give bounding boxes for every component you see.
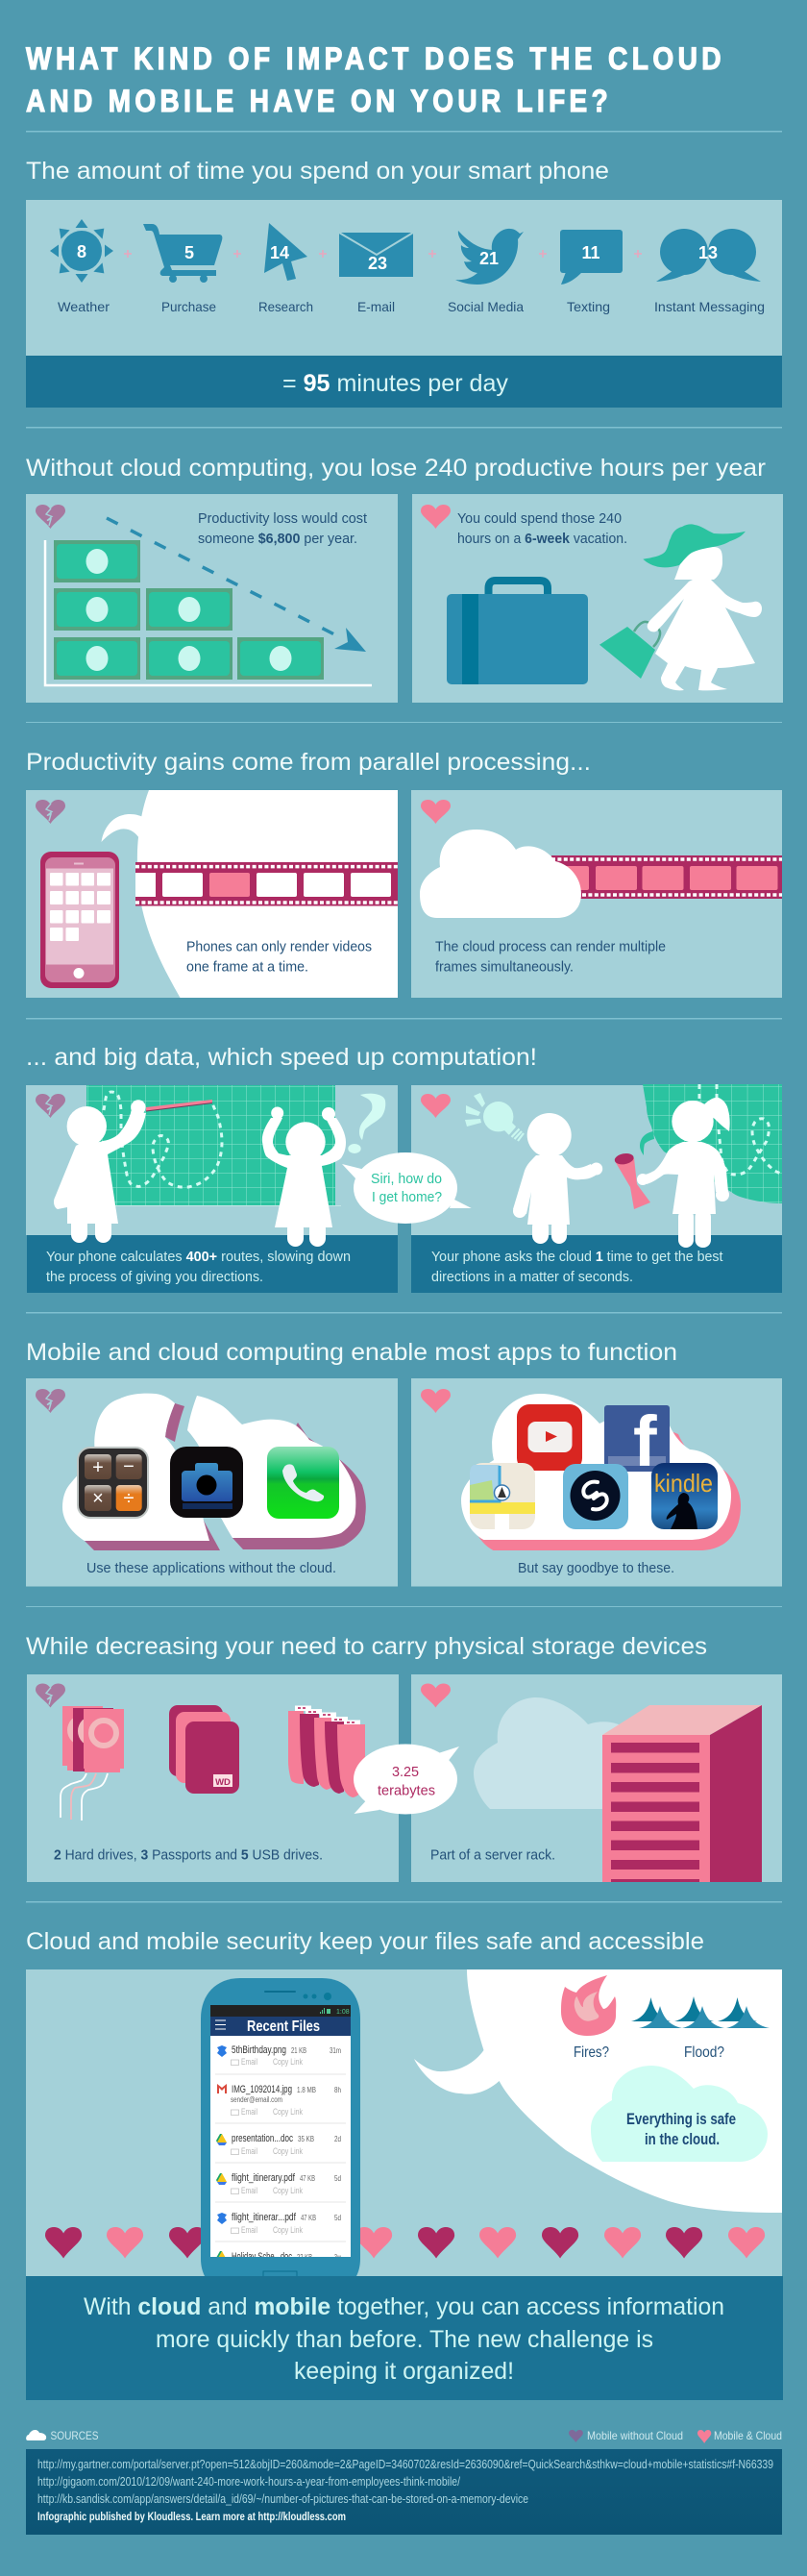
caption: Use these applications without the cloud. bbox=[86, 1561, 336, 1576]
icon: weather sun bbox=[50, 219, 113, 283]
text: cloud bbox=[435, 940, 666, 975]
file row: 5thBirthday.png: 31m bbox=[330, 2046, 341, 2055]
app title bar: Recent Files bbox=[247, 2019, 320, 2035]
icon: calculator app: × bbox=[92, 1488, 104, 1509]
conclusion bar bbox=[26, 2276, 783, 2400]
text: phones bbox=[186, 940, 372, 975]
text: vacation bbox=[457, 511, 627, 547]
file row: flight_itinerar...pdf: Email bbox=[241, 2225, 257, 2235]
icon: envelope: 23 bbox=[368, 254, 387, 273]
illustration: film strip, all frames bbox=[548, 855, 782, 899]
file row: 5thBirthday.png bbox=[217, 2044, 341, 2067]
file row: IMG_1092014.jpg: Copy Link bbox=[273, 2107, 303, 2117]
total bar: 95 minutes per day: = 95 minutes per day bbox=[282, 370, 508, 397]
icon: shopping cart: 5 bbox=[184, 243, 194, 262]
activity labels: Social Media bbox=[448, 299, 524, 314]
speech bubble: Siri bbox=[342, 1152, 472, 1224]
icon: twitter bird: 21 bbox=[479, 249, 499, 268]
callout: safe cloud bbox=[591, 2066, 768, 2162]
file row: presentation...doc: Email bbox=[241, 2146, 257, 2156]
icon: shopping cart bbox=[143, 224, 222, 283]
legend: Mobile & Cloud bbox=[714, 2429, 782, 2442]
file row: presentation...doc: 2d bbox=[334, 2135, 341, 2143]
icon: passports bbox=[169, 1705, 239, 1794]
panel: sources: http://kb.sandisk.com/app/answers/detail/a_id/69/~/number-of-pictures-that-can-be-stored-on-a-memory-device bbox=[37, 2492, 528, 2506]
panel: apps without cloud bbox=[26, 1378, 398, 1586]
icon: camera app bbox=[170, 1447, 243, 1518]
plus signs bbox=[124, 250, 642, 258]
illustration: smart phone with recent files bbox=[201, 1978, 360, 2277]
file row: flight_itinerary.pdf: flight_itinerary.pdf bbox=[232, 2172, 296, 2184]
icon: broken heart bbox=[36, 1389, 65, 1413]
text: 400+ routes: the process of giving you directions. bbox=[46, 1270, 263, 1285]
title bbox=[26, 41, 725, 118]
text: drives: 2 Hard drives, 3 Passports and 5 USB drives. bbox=[54, 1847, 323, 1863]
icon: server rack bbox=[602, 1705, 762, 1882]
icon: weather sun: 8 bbox=[77, 242, 86, 261]
file row: flight_itinerary.pdf: 47 KB bbox=[300, 2174, 315, 2183]
heading: big data: ... and big data, which speed up computation! bbox=[26, 1044, 537, 1071]
callout: safe cloud: in the cloud. bbox=[645, 2131, 720, 2148]
total bar: 95 minutes per day bbox=[26, 356, 782, 408]
icon: cursor: 14 bbox=[270, 243, 289, 262]
conclusion bar: With cloud and mobile together, you can access information bbox=[84, 2293, 724, 2320]
illustration: whole cloud bbox=[461, 1394, 741, 1550]
speech bubble: terabytes: 3.25 bbox=[392, 1764, 419, 1780]
icon: cloud bbox=[420, 830, 581, 918]
text: cost: Productivity loss would cost bbox=[198, 511, 367, 527]
illustration: person with raised arms bbox=[262, 1107, 346, 1247]
text: vacation: You could spend those 240 bbox=[457, 511, 622, 527]
speech bubble: Siri: Siri, how do bbox=[371, 1171, 442, 1187]
icon: fire bbox=[561, 1975, 616, 2036]
text: phones: one frame at a time. bbox=[186, 959, 308, 975]
file row: presentation...doc: presentation...doc bbox=[232, 2133, 293, 2144]
file list bbox=[210, 2036, 351, 2263]
activity labels: Texting bbox=[567, 299, 610, 314]
file row: IMG_1092014.jpg: Email bbox=[241, 2107, 257, 2117]
text: 1 time: Your phone asks the cloud 1 time to get the best bbox=[431, 1250, 722, 1265]
file row: flight_itinerary.pdf bbox=[216, 2172, 341, 2195]
text: cloud: The cloud process can render multiple bbox=[435, 940, 666, 955]
icon: calculator app: − bbox=[123, 1456, 134, 1477]
panel: vacation bbox=[412, 494, 783, 703]
file row: flight_itinerar...pdf bbox=[217, 2212, 341, 2235]
file row: 5thBirthday.png: Email bbox=[241, 2057, 257, 2067]
icon: heart bbox=[421, 505, 451, 529]
text: server: Part of a server rack. bbox=[430, 1847, 555, 1863]
icon: flood waves bbox=[631, 1996, 770, 2028]
illustration: girl with ponytail bbox=[637, 1098, 730, 1248]
caption: But say goodbye to these. bbox=[518, 1561, 674, 1576]
panel: phone renders one frame bbox=[26, 790, 398, 998]
activity labels: Weather bbox=[58, 299, 110, 314]
file row: flight_itinerar...pdf: 47 KB bbox=[301, 2214, 316, 2222]
file row: flight_itinerary.pdf: 5d bbox=[334, 2174, 341, 2183]
icon: question mark bbox=[348, 1094, 385, 1153]
icon: chat bubbles: 13 bbox=[698, 243, 718, 262]
file row: flight_itinerary.pdf: Copy Link bbox=[273, 2186, 303, 2195]
icon: light bulb bbox=[465, 1093, 524, 1141]
app title bar bbox=[210, 2017, 351, 2036]
icon: heart bbox=[421, 1094, 451, 1118]
panel: server rack bbox=[411, 1674, 782, 1882]
file row: presentation...doc bbox=[216, 2133, 341, 2156]
heading: security: Cloud and mobile security keep your files safe and accessible bbox=[26, 1928, 704, 1955]
heading: parallel processing: Productivity gains come from parallel processing... bbox=[26, 749, 591, 776]
file row: 5thBirthday.png: 21 KB bbox=[291, 2046, 306, 2055]
activity labels bbox=[58, 299, 765, 314]
legend bbox=[569, 2429, 782, 2443]
panel: security bbox=[26, 1969, 782, 2277]
icon: pale cloud bbox=[474, 1697, 634, 1809]
text: cost: someone $6,800 per year. bbox=[198, 532, 357, 547]
icon: kindle app: kindle bbox=[654, 1469, 713, 1498]
icon: scroll bbox=[614, 1152, 650, 1209]
file row: flight_itinerar...pdf: Copy Link bbox=[273, 2225, 303, 2235]
white speech bubble bbox=[414, 1969, 782, 2213]
icon: broken heart bbox=[36, 1094, 65, 1118]
activity labels: Instant Messaging bbox=[654, 299, 765, 314]
icon: kindle app bbox=[651, 1463, 718, 1529]
text: fires, flood: Flood? bbox=[684, 2044, 724, 2061]
file row: Holiday Sche...doc, cut off bbox=[217, 2251, 341, 2257]
file row: flight_itinerar...pdf: flight_itinerar...pdf bbox=[232, 2212, 297, 2223]
file row: Holiday Sche...doc, cut off: 22 KB bbox=[297, 2253, 312, 2262]
heading: storage: While decreasing your need to carry physical storage devices bbox=[26, 1633, 707, 1660]
speech bubble: Siri: I get home? bbox=[372, 1189, 442, 1205]
sources heading: SOURCES bbox=[50, 2429, 98, 2442]
panel: physical storage bbox=[27, 1674, 399, 1882]
sources heading bbox=[26, 2429, 98, 2442]
file row: Holiday Sche...doc, cut off: 3w bbox=[334, 2253, 341, 2262]
activity labels: Purchase bbox=[161, 299, 216, 314]
callout: safe cloud: Everything is safe bbox=[626, 2111, 736, 2128]
icon: heart bbox=[421, 1684, 451, 1707]
arrow: downward trend bbox=[107, 518, 366, 652]
chalkboard bbox=[640, 1084, 783, 1203]
icon: heart bbox=[421, 1389, 451, 1413]
text: phones: Phones can only render videos bbox=[186, 940, 372, 955]
panel: phone calculates routes bbox=[26, 1085, 398, 1293]
title: WHAT KIND OF IMPACT DOES THE CLOUD bbox=[26, 41, 725, 76]
file row: 5thBirthday.png: Copy Link bbox=[273, 2057, 303, 2067]
heading: lost hours: Without cloud computing, you lose 240 productive hours per year bbox=[26, 455, 766, 482]
activity labels: E-mail bbox=[357, 299, 395, 314]
title: AND MOBILE HAVE ON YOUR LIFE? bbox=[26, 84, 612, 118]
illustration: broken cloud bbox=[62, 1394, 366, 1550]
activity labels: Research bbox=[258, 299, 313, 314]
speech bubble: terabytes bbox=[354, 1744, 459, 1815]
file row: IMG_1092014.jpg: IMG_1092014.jpg bbox=[232, 2084, 292, 2095]
text: 1 time bbox=[431, 1250, 722, 1285]
icon: calculator app: + bbox=[92, 1457, 104, 1478]
icon: twitter bird bbox=[455, 229, 524, 285]
file row: IMG_1092014.jpg: 8h bbox=[334, 2086, 341, 2094]
file row: 5thBirthday.png: 5thBirthday.png bbox=[232, 2044, 286, 2056]
panel: sources bbox=[26, 2449, 782, 2535]
icon: facebook app bbox=[604, 1401, 670, 1481]
chalkboard bbox=[86, 1085, 341, 1206]
text: vacation: hours on a 6-week vacation. bbox=[457, 532, 627, 547]
panel: sources: http://gigaom.com/2010/12/09/want-240-more-work-hours-a-year-from-employees-think-mobile/ bbox=[37, 2475, 460, 2489]
illustration: girl with hat and bag bbox=[599, 524, 762, 690]
icon: chat bubbles bbox=[656, 229, 761, 282]
icon: calculator app: ÷ bbox=[124, 1488, 134, 1509]
heading: apps: Mobile and cloud computing enable most apps to function bbox=[26, 1339, 677, 1366]
icon: heart bbox=[421, 800, 451, 824]
panel: apps with cloud bbox=[411, 1378, 782, 1586]
text: 400+ routes bbox=[46, 1250, 351, 1285]
icon: passports: WD bbox=[215, 1777, 231, 1788]
icon: shazam app bbox=[563, 1464, 628, 1529]
text: 1 time: directions in a matter of seconds. bbox=[431, 1270, 633, 1285]
speech bubble: terabytes: terabytes bbox=[378, 1782, 435, 1799]
status bar bbox=[210, 2005, 351, 2017]
file row: presentation...doc: Copy Link bbox=[273, 2146, 303, 2156]
icon: suitcase bbox=[447, 581, 588, 684]
heading: time on smart phone: The amount of time you spend on your smart phone bbox=[26, 158, 609, 185]
icon: text bubble bbox=[560, 230, 623, 285]
status bar: 1:08 bbox=[336, 2009, 350, 2016]
icon: maps app bbox=[470, 1463, 535, 1529]
file row: IMG_1092014.jpg bbox=[217, 2084, 341, 2117]
file row: presentation...doc: 35 KB bbox=[298, 2135, 314, 2143]
illustration: person with pointer bbox=[54, 1100, 212, 1243]
icon: facebook app: f bbox=[633, 1401, 657, 1481]
text: fires, flood: Fires? bbox=[574, 2044, 609, 2061]
text: cost bbox=[198, 511, 367, 547]
icon: broken heart bbox=[36, 1684, 65, 1707]
icon: youtube app bbox=[517, 1404, 582, 1471]
panel: sources: Infographic published by Kloudless. Learn more at http://kloudless.com bbox=[37, 2510, 346, 2523]
icon: hard drives bbox=[61, 1706, 124, 1821]
file row: IMG_1092014.jpg: 1.8 MB bbox=[297, 2086, 316, 2094]
file row: flight_itinerary.pdf: Email bbox=[241, 2186, 257, 2195]
speech bubble background bbox=[102, 790, 398, 998]
panel: smart phone minutes bbox=[26, 200, 782, 356]
text: cloud: frames simultaneously. bbox=[435, 959, 574, 975]
icon: broken heart bbox=[36, 505, 65, 529]
file row: Holiday Sche...doc, cut off: Holiday Sche...doc bbox=[232, 2251, 292, 2263]
icon: cursor bbox=[264, 223, 307, 281]
illustration: smart phone bbox=[40, 852, 119, 988]
text: fires, flood bbox=[574, 2044, 724, 2061]
text: 400+ routes: Your phone calculates 400+ routes, slowing down bbox=[46, 1250, 351, 1265]
chart: shrinking money stacks bbox=[45, 540, 372, 685]
icon: text bubble: 11 bbox=[581, 243, 600, 262]
legend: Mobile without Cloud bbox=[587, 2429, 683, 2442]
icon: envelope bbox=[339, 233, 413, 277]
panel: cloud gets best directions bbox=[411, 1084, 783, 1293]
icon: USB drives bbox=[288, 1705, 365, 1797]
illustration: person asking bbox=[513, 1113, 602, 1244]
conclusion bar: keeping it organized! bbox=[294, 2358, 514, 2385]
file row: flight_itinerar...pdf: 5d bbox=[334, 2214, 341, 2222]
conclusion bar: more quickly than before. The new challenge is bbox=[156, 2326, 653, 2353]
icon: broken heart bbox=[36, 800, 65, 824]
panel: productivity loss bbox=[26, 494, 398, 703]
icon: calculator app bbox=[78, 1448, 148, 1518]
panel: cloud renders many frames bbox=[411, 790, 782, 998]
illustration: film strip, single frame bbox=[135, 862, 398, 905]
row of hearts bbox=[45, 2227, 765, 2259]
icon: phone app bbox=[267, 1447, 339, 1519]
file row: IMG_1092014.jpg: sender@email.com bbox=[231, 2095, 282, 2104]
